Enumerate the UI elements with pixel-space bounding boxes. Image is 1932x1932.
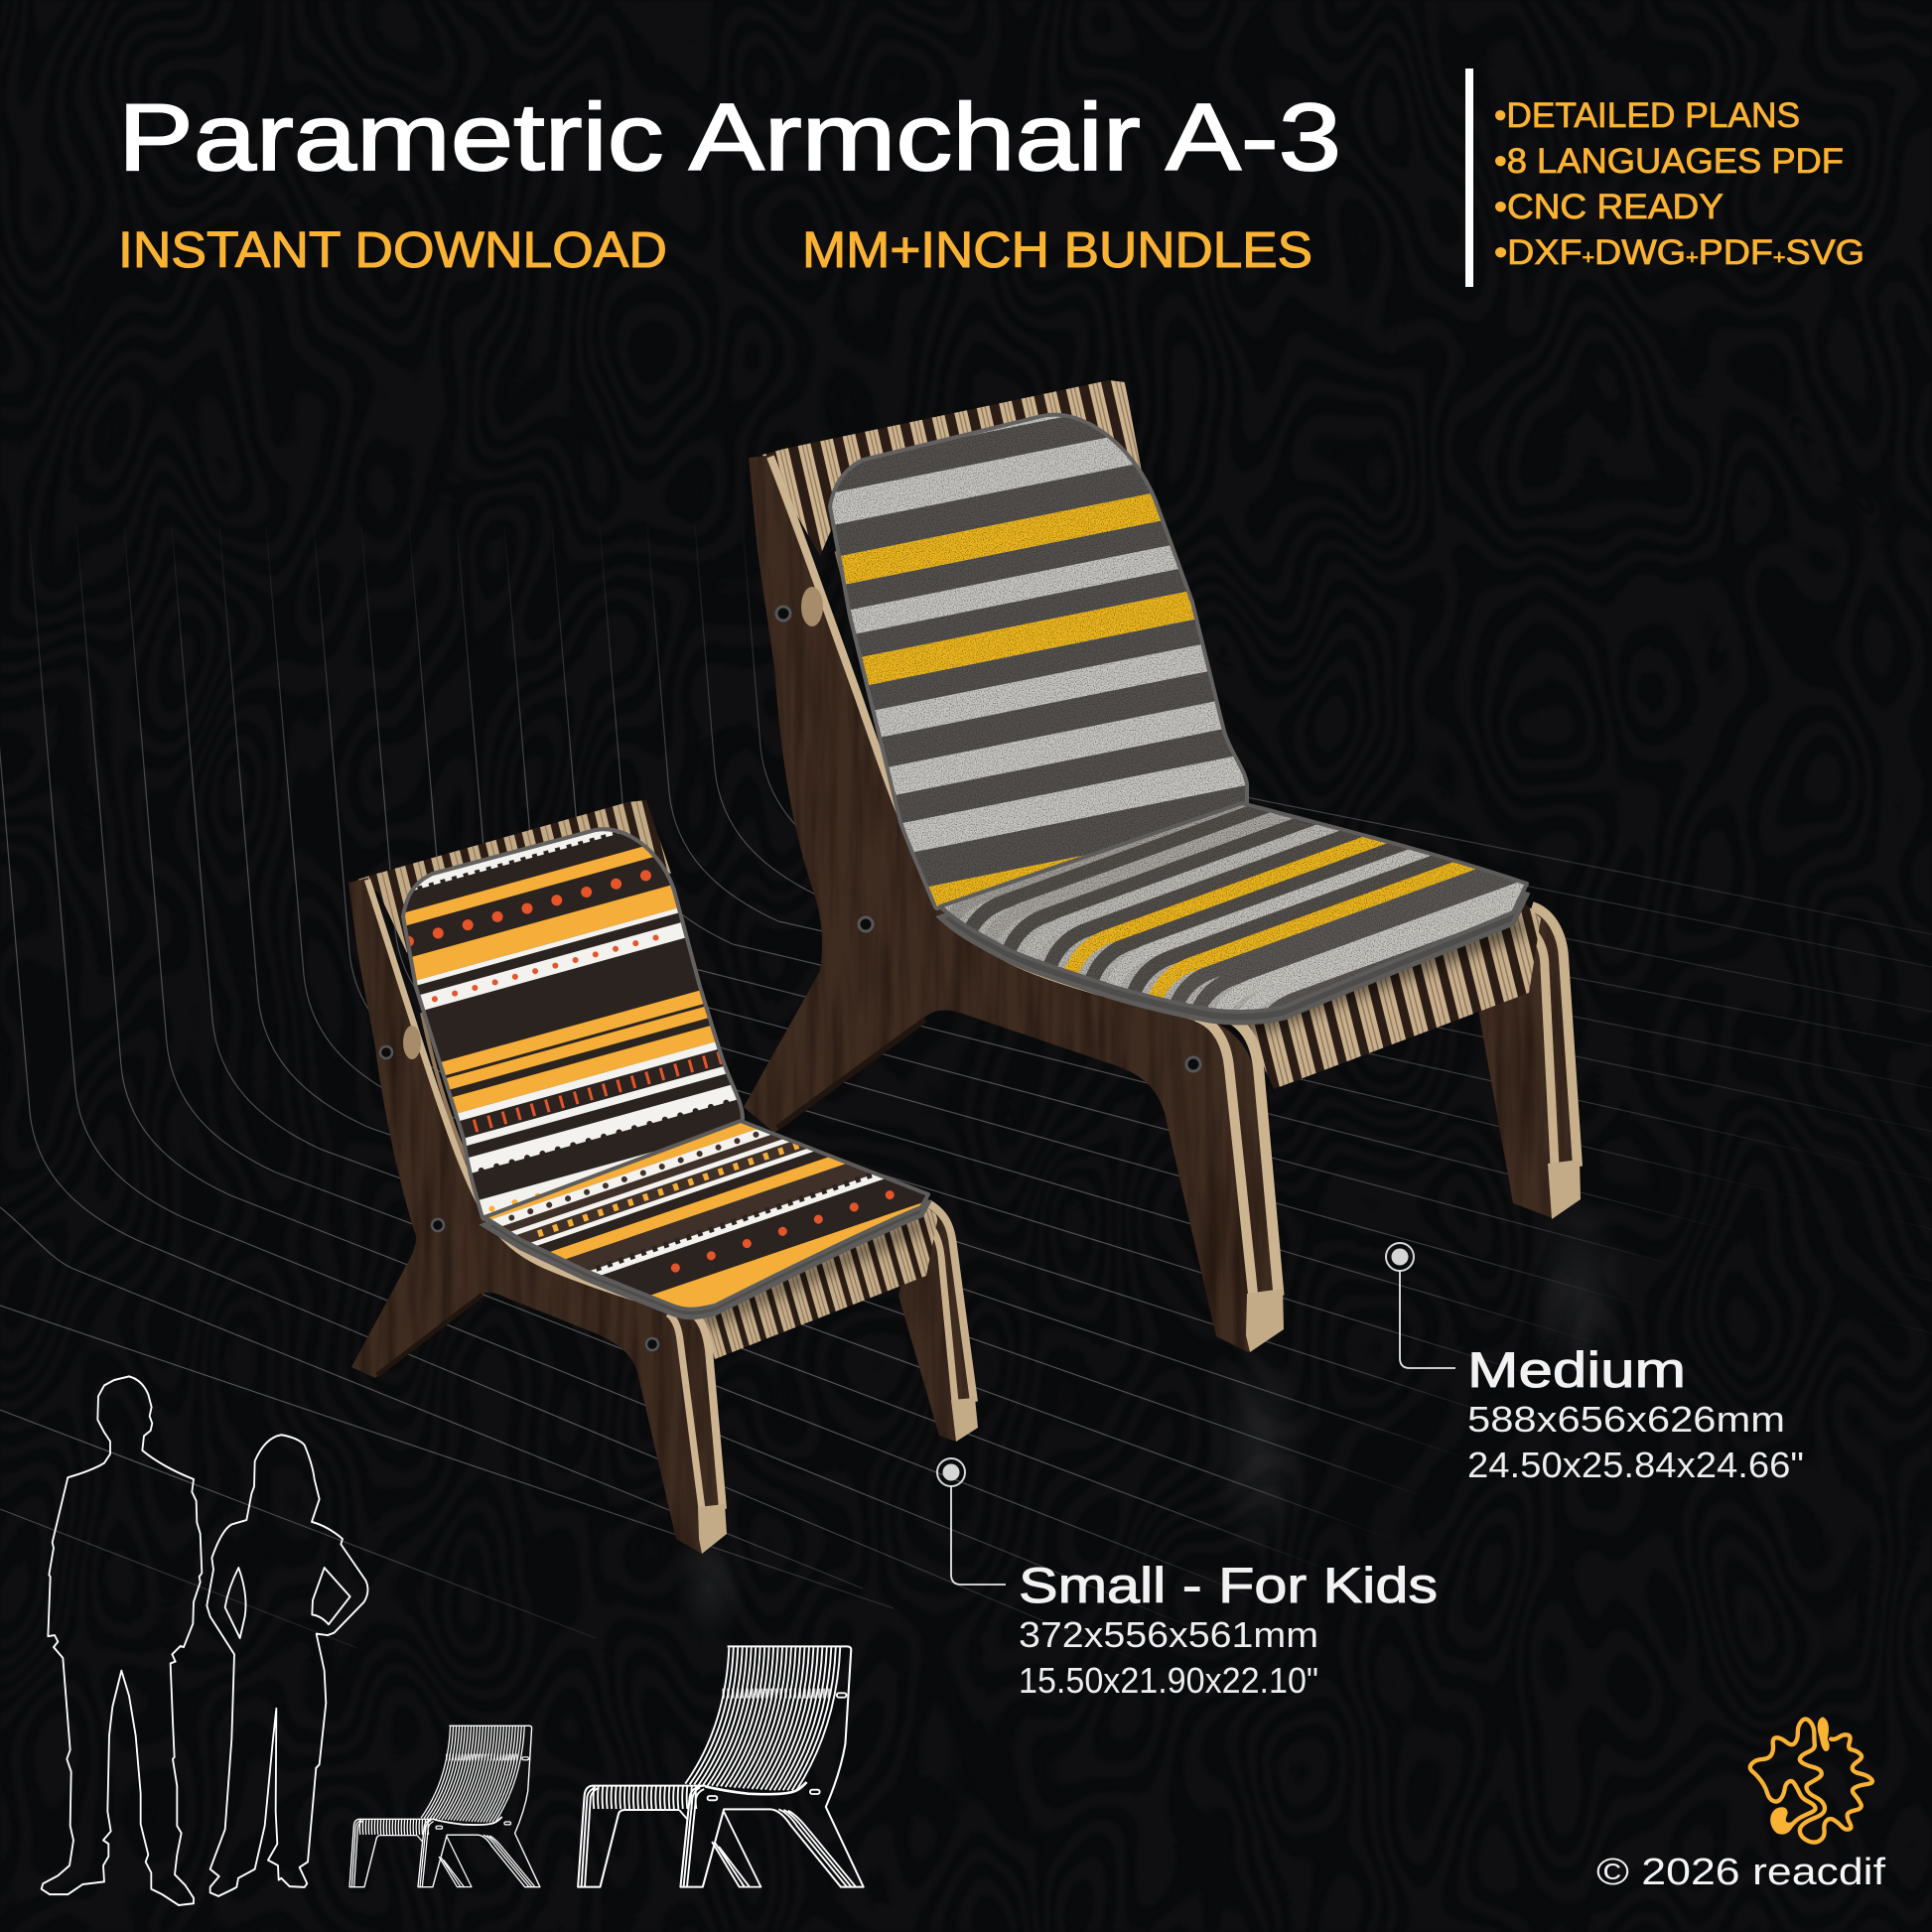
- title: Parametric Armchair A-3: [118, 84, 1341, 191]
- logo: [1750, 1717, 1872, 1843]
- small chair: [348, 800, 978, 1554]
- floor reflections: [675, 1191, 1628, 1648]
- icon: wireframe chairs: [349, 1646, 864, 1887]
- bolts: [380, 1046, 658, 1350]
- icon: man: [42, 1376, 202, 1905]
- subtitle: instant download: INSTANT DOWNLOAD: [118, 221, 667, 278]
- inner ply: [422, 1013, 667, 1295]
- icon: woman: [207, 1435, 367, 1896]
- marker: [937, 1458, 965, 1486]
- feature: detailed plans: •DETAILED PLANS: [1494, 96, 1800, 135]
- plywood edge: [770, 457, 1203, 1019]
- under strip: [377, 1295, 483, 1375]
- far leg: [898, 1201, 978, 1442]
- callout: small: [937, 1458, 1438, 1701]
- medium chair: [744, 380, 1583, 1352]
- vertical divider: [1465, 69, 1473, 287]
- back slats: [762, 380, 1142, 556]
- dimensions inch: 24.50x25.84x24.66": [1467, 1445, 1804, 1485]
- front leg stripes: [1196, 1015, 1284, 1352]
- floor and wall contour lines: [0, 538, 1932, 1651]
- leader line: [1400, 1271, 1455, 1368]
- front leg stripes: [668, 1311, 727, 1554]
- back cushion: [401, 827, 745, 1221]
- feature list: [1494, 96, 1864, 272]
- copyright: © 2026 reacdif: [1596, 1852, 1886, 1893]
- seat cushion: [935, 801, 1531, 1025]
- side panel: [744, 455, 1282, 1352]
- seat cushion: [479, 1119, 931, 1320]
- shadow under seat cushion: [1231, 923, 1524, 1033]
- callout: medium: [1386, 1243, 1804, 1485]
- label: medium: Medium: [1467, 1342, 1686, 1398]
- feature: languages: •8 LANGUAGES PDF: [1494, 142, 1844, 181]
- label: small for kids: Small - For Kids: [1019, 1558, 1438, 1613]
- seat slats: [1216, 898, 1541, 1089]
- back cushion: [828, 413, 1249, 910]
- plywood edge: [367, 880, 681, 1311]
- icon: human silhouettes: [42, 1376, 367, 1905]
- inner ply: [837, 551, 1186, 1005]
- dimensions mm: 372x556x561mm: [1019, 1614, 1318, 1655]
- side panel: [348, 878, 727, 1554]
- dimensions inch: 15.50x21.90x22.10": [1019, 1660, 1318, 1701]
- marker: [1386, 1243, 1414, 1271]
- feature: file formats: •DXF +DWG +PDF +SVG: [1494, 233, 1864, 272]
- icon: small wireframe chair: [349, 1725, 540, 1887]
- dimensions mm: 588x656x626mm: [1467, 1399, 1785, 1440]
- round knob: [801, 587, 823, 626]
- seat slats: [676, 1204, 938, 1359]
- under strip: [777, 1020, 925, 1128]
- shadow under seat cushion: [695, 1223, 923, 1325]
- far leg: [1478, 906, 1581, 1219]
- subtitle: mm + inch bundles: MM+INCH BUNDLES: [802, 221, 1312, 278]
- icon: medium wireframe chair: [578, 1646, 864, 1887]
- round knob: [403, 1026, 421, 1059]
- leader line: [951, 1486, 1006, 1585]
- bolts: [776, 607, 1200, 1071]
- feature: cnc ready: •CNC READY: [1494, 188, 1724, 226]
- back slats: [357, 800, 671, 953]
